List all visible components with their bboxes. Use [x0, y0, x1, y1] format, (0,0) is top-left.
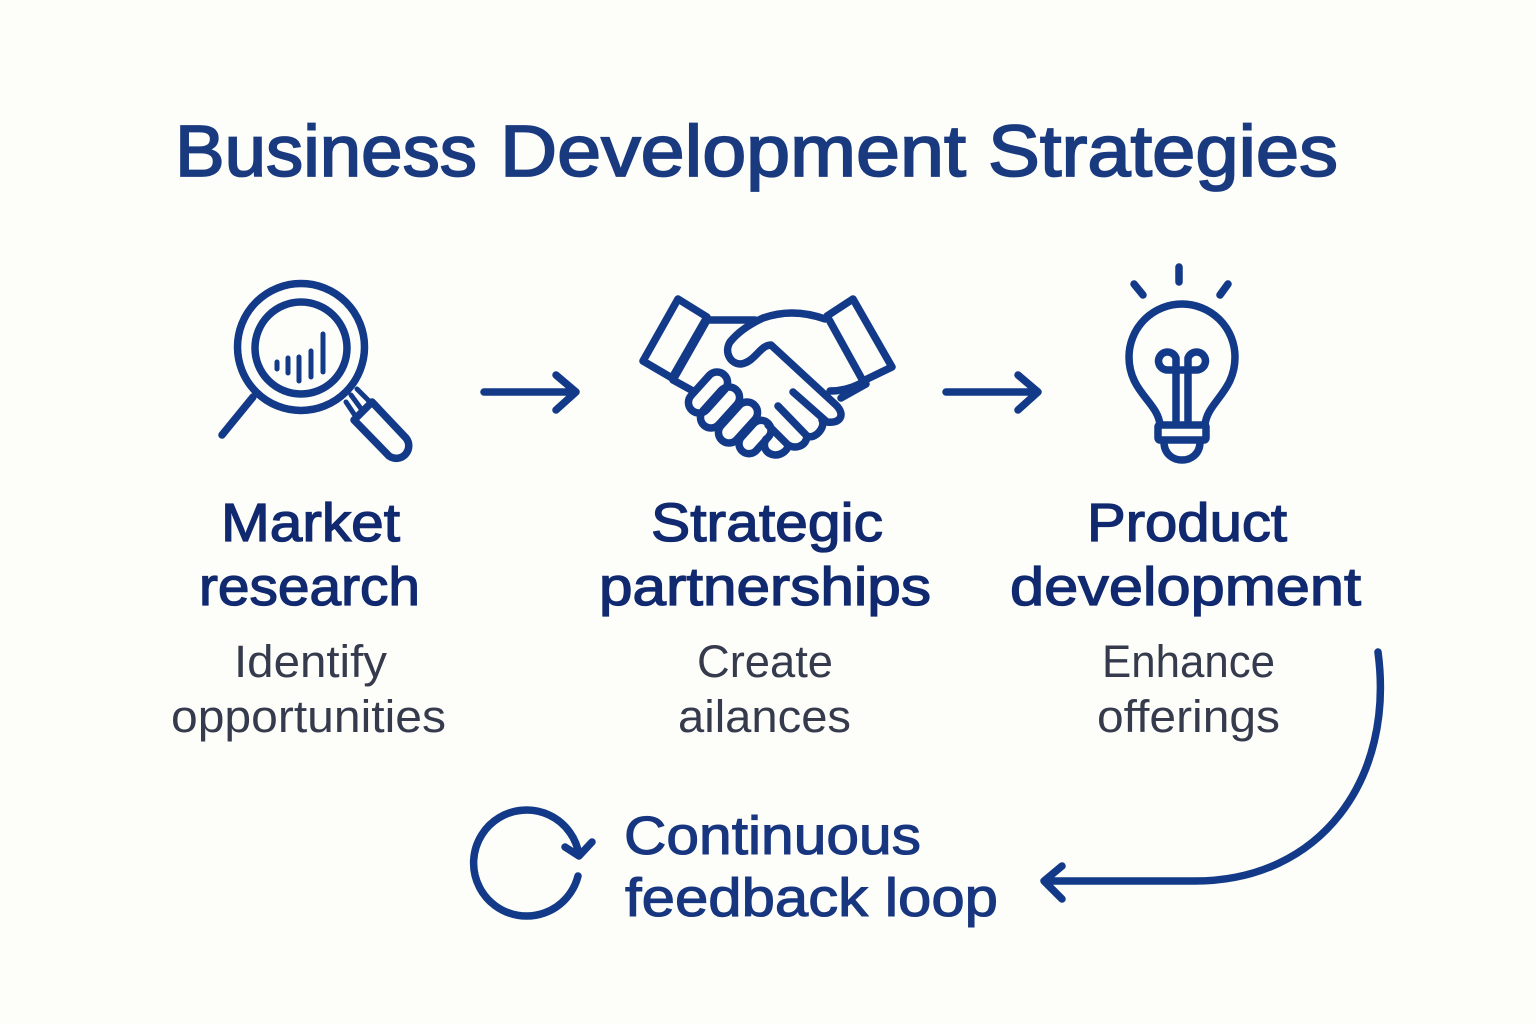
panel: market research — [171, 284, 446, 742]
arrow: curved return to feedback loop — [1044, 652, 1380, 899]
description: enhance offerings: offerings — [1097, 691, 1280, 742]
description: identify opportunities: opportunities — [171, 691, 446, 742]
heading: strategic partnerships: Strategic — [651, 493, 883, 553]
description: create alliances: Create — [697, 636, 833, 687]
icon: magnifying glass with bar chart — [222, 284, 409, 458]
icon: light bulb — [1129, 267, 1235, 460]
title — [175, 112, 1338, 192]
heading: strategic partnerships: partnerships — [599, 557, 931, 617]
heading: market research: Market — [221, 493, 400, 553]
panel: strategic partnerships — [599, 299, 931, 742]
arrow: market research to partnerships — [484, 375, 576, 410]
description: enhance offerings: Enhance — [1102, 636, 1275, 687]
panel: continuous feedback loop — [474, 806, 998, 928]
heading: product development: Product — [1087, 493, 1287, 553]
description: identify opportunities — [171, 636, 446, 742]
heading: product development: development — [1010, 557, 1361, 617]
icon: handshake — [643, 299, 892, 458]
heading: product development — [1010, 493, 1361, 617]
title: Strategies — [988, 112, 1338, 192]
description: enhance offerings — [1097, 636, 1280, 742]
description: identify opportunities: Identify — [234, 636, 388, 687]
heading: continuous feedback loop — [624, 806, 998, 928]
heading: continuous feedback loop: feedback loop — [625, 868, 998, 928]
heading: continuous feedback loop: Continuous — [624, 806, 921, 866]
arrow: partnerships to product development — [946, 375, 1038, 410]
heading: strategic partnerships — [599, 493, 931, 617]
icon: circular arrow — [474, 810, 592, 916]
panel: product development — [1010, 267, 1361, 742]
heading: market research — [199, 493, 420, 617]
title: Development — [500, 112, 966, 192]
description: create alliances: ailances — [678, 691, 851, 742]
heading: market research: research — [199, 557, 420, 617]
title: Business — [175, 112, 477, 192]
description: create alliances — [678, 636, 851, 742]
